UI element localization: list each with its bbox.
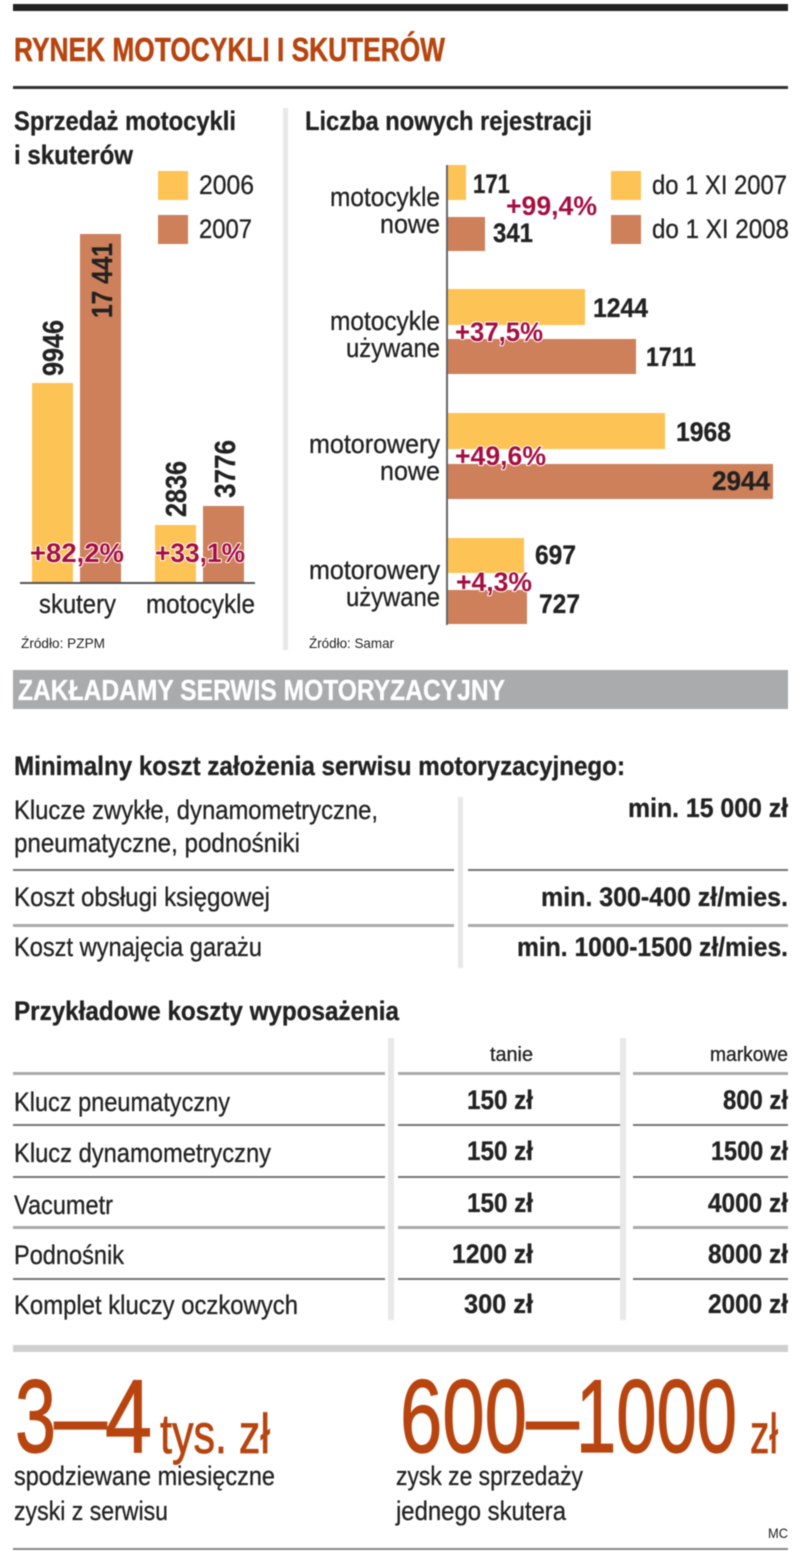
heading: minimum cost: Minimalny koszt założenia serwisu motoryzacyjnego: <box>14 751 625 781</box>
panel: equipment cost table: 4000 zł <box>708 1188 788 1218</box>
bar chart: registrations: używane <box>346 333 440 363</box>
bar chart: registrations: motorowery <box>309 555 440 585</box>
panel: equipment cost table: 1500 zł <box>711 1136 788 1166</box>
callout: scooter profit: zł <box>750 1402 778 1465</box>
bar chart: sales: 17 441 <box>87 243 119 318</box>
heading: sales <box>14 106 236 170</box>
panel: minimum cost table: min. 300-400 zł/mies. <box>541 882 788 912</box>
bar chart: sales: motocykle <box>146 589 255 619</box>
panel: minimum cost table: Koszt wynajęcia garażu <box>14 932 262 962</box>
heading: equipment costs: Przykładowe koszty wyposażenia <box>14 996 400 1026</box>
bar chart: registrations: nowe <box>380 209 440 239</box>
source: PZPM: Źródło: PZPM <box>21 635 105 651</box>
bar chart: registrations: 727 <box>539 589 580 619</box>
callout: monthly profit: 4 <box>105 1359 152 1475</box>
panel: equipment cost table: 150 zł <box>467 1188 533 1218</box>
callout: scooter profit: 1000 <box>576 1359 737 1475</box>
heading: sales: Sprzedaż motocykli <box>14 106 236 136</box>
callout: scooter profit: zysk ze sprzedaży <box>396 1461 583 1491</box>
bar chart: registrations: +37,5% <box>455 317 543 347</box>
bar chart: registrations: +49,6% <box>455 441 546 471</box>
legend: years <box>158 170 254 244</box>
heading: registrations: Liczba nowych rejestracji <box>305 106 592 136</box>
section banner: ZAKŁADAMY SERWIS MOTORYZACYJNY <box>18 675 505 707</box>
bar chart: registrations: motocykle <box>330 182 440 212</box>
callout: monthly profit: 3 <box>15 1359 56 1475</box>
bar chart: registrations: 2944 <box>712 466 770 496</box>
legend: dates: do 1 XI 2007 <box>652 170 787 200</box>
section banner <box>13 670 788 709</box>
heading: sales: i skuterów <box>14 140 134 170</box>
bar chart: registrations: 697 <box>535 540 576 570</box>
panel: minimum cost table: Klucze zwykłe, dynamometryczne, <box>14 795 378 825</box>
callout: scooter profit: 600 <box>400 1359 527 1475</box>
bar chart: registrations <box>309 165 773 625</box>
title: RYNEK MOTOCYKLI I SKUTERÓW <box>14 31 445 69</box>
bar chart: registrations: 1968 <box>676 417 731 447</box>
panel: equipment cost table: tanie <box>490 1044 533 1066</box>
bar chart: registrations: 1711 <box>646 342 696 372</box>
panel: equipment cost table: Klucz pneumatyczny <box>14 1087 230 1117</box>
panel: equipment cost table: Vacumetr <box>14 1190 113 1220</box>
panel: minimum cost table: min. 15 000 zł <box>628 793 788 823</box>
panel: equipment cost table <box>13 996 788 1320</box>
panel: equipment cost table: 1200 zł <box>452 1239 533 1269</box>
panel: minimum cost table <box>13 751 788 968</box>
legend: dates: do 1 XI 2008 <box>652 214 789 244</box>
callout: monthly profit: tys. zł <box>160 1402 270 1465</box>
panel: equipment cost table: 300 zł <box>464 1289 533 1319</box>
legend: years: 2006 <box>199 170 254 200</box>
panel: minimum cost table: pneumatyczne, podnośniki <box>14 828 300 858</box>
bar chart: registrations: 1244 <box>593 293 648 323</box>
bar chart: sales: skutery <box>39 589 116 619</box>
bar chart: registrations: nowe <box>380 456 440 486</box>
bar chart: registrations: motorowery <box>309 429 440 459</box>
bar chart: registrations: 171 <box>473 169 510 199</box>
callout: monthly profit: — <box>54 1359 107 1475</box>
bar chart: sales <box>20 234 255 619</box>
panel: equipment cost table: 2000 zł <box>708 1289 788 1319</box>
bar chart: registrations: motocykle <box>330 306 440 336</box>
bar chart: sales: +82,2% <box>30 538 124 568</box>
legend: dates <box>611 170 789 244</box>
callout: monthly profit <box>14 1359 275 1526</box>
callout: monthly profit: zyski z serwisu <box>14 1496 168 1526</box>
bar chart: registrations: 341 <box>493 218 533 248</box>
callout: scooter profit <box>395 1359 778 1526</box>
bar chart: sales: +33,1% <box>155 538 245 568</box>
bar chart: sales: 9946 <box>38 320 70 376</box>
panel: equipment cost table: 8000 zł <box>708 1239 788 1269</box>
panel: equipment cost table: Komplet kluczy oczkowych <box>14 1290 298 1320</box>
bar chart: registrations: +4,3% <box>456 567 532 597</box>
panel: equipment cost table: markowe <box>710 1044 788 1066</box>
bar chart: sales: 2836 <box>161 461 193 517</box>
panel: equipment cost table: 150 zł <box>467 1136 533 1166</box>
credit: MC <box>768 1525 788 1541</box>
bar chart: registrations: używane <box>346 582 440 612</box>
panel: registrations chart <box>305 106 789 651</box>
panel: equipment cost table: 800 zł <box>723 1085 788 1115</box>
legend: years: 2007 <box>199 214 252 244</box>
bar chart: registrations: +99,4% <box>506 191 597 221</box>
bar chart: sales: 3776 <box>210 440 242 498</box>
callout: monthly profit: spodziewane miesięczne <box>14 1461 275 1491</box>
panel: equipment cost table: 150 zł <box>467 1085 533 1115</box>
callout: scooter profit: jednego skutera <box>395 1496 567 1526</box>
source: Samar: Źródło: Samar <box>309 635 394 651</box>
panel: sales chart <box>14 106 255 651</box>
panel: equipment cost table: Podnośnik <box>14 1240 124 1270</box>
panel: minimum cost table: Koszt obsługi księgowej <box>14 882 270 912</box>
panel: equipment cost table: Klucz dynamometryczny <box>14 1138 271 1168</box>
callout: scooter profit: — <box>526 1359 579 1475</box>
